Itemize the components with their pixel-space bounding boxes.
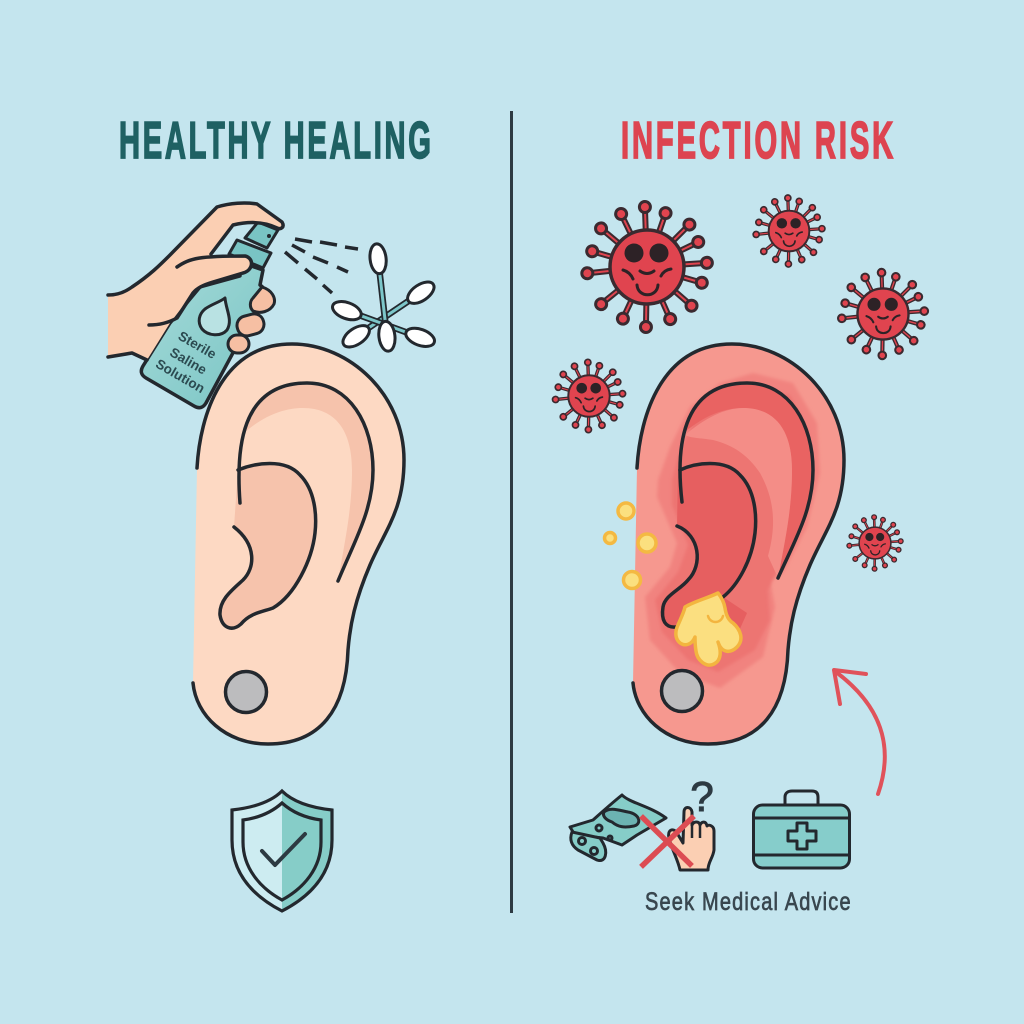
virus large [581, 201, 713, 333]
healthy ear [193, 344, 404, 744]
virus left [552, 359, 626, 433]
red cross [643, 818, 692, 865]
icon: first aid kit [754, 791, 850, 868]
virus lower right [847, 515, 903, 571]
center divider [510, 111, 513, 913]
title: Infection Risk: INFECTION RISK [621, 111, 894, 169]
icon: water drop on bottle [199, 298, 229, 335]
arrow to ear [834, 670, 885, 794]
icon: dirty wipe [570, 795, 666, 861]
spray mist dashes [285, 239, 358, 293]
bottle label: Solution [153, 356, 207, 396]
question mark: ? [690, 773, 714, 820]
bottle label: Saline [167, 345, 210, 378]
pus discharge [676, 593, 741, 665]
caption: seek medical advice: Seek Medical Advice [645, 888, 851, 916]
pus droplets [604, 503, 656, 588]
virus right [838, 269, 928, 359]
title: Healthy Healing: HEALTHY HEALING [119, 111, 431, 169]
virus top [753, 195, 825, 267]
icon: hand touching [669, 808, 714, 870]
hand holding spray [108, 203, 283, 360]
cotton swabs [330, 243, 438, 352]
icon: shield with check [232, 791, 332, 911]
bottle label [153, 328, 219, 396]
bottle label: Sterile [176, 328, 219, 362]
infected ear [633, 344, 844, 744]
spray bottle [141, 222, 278, 408]
